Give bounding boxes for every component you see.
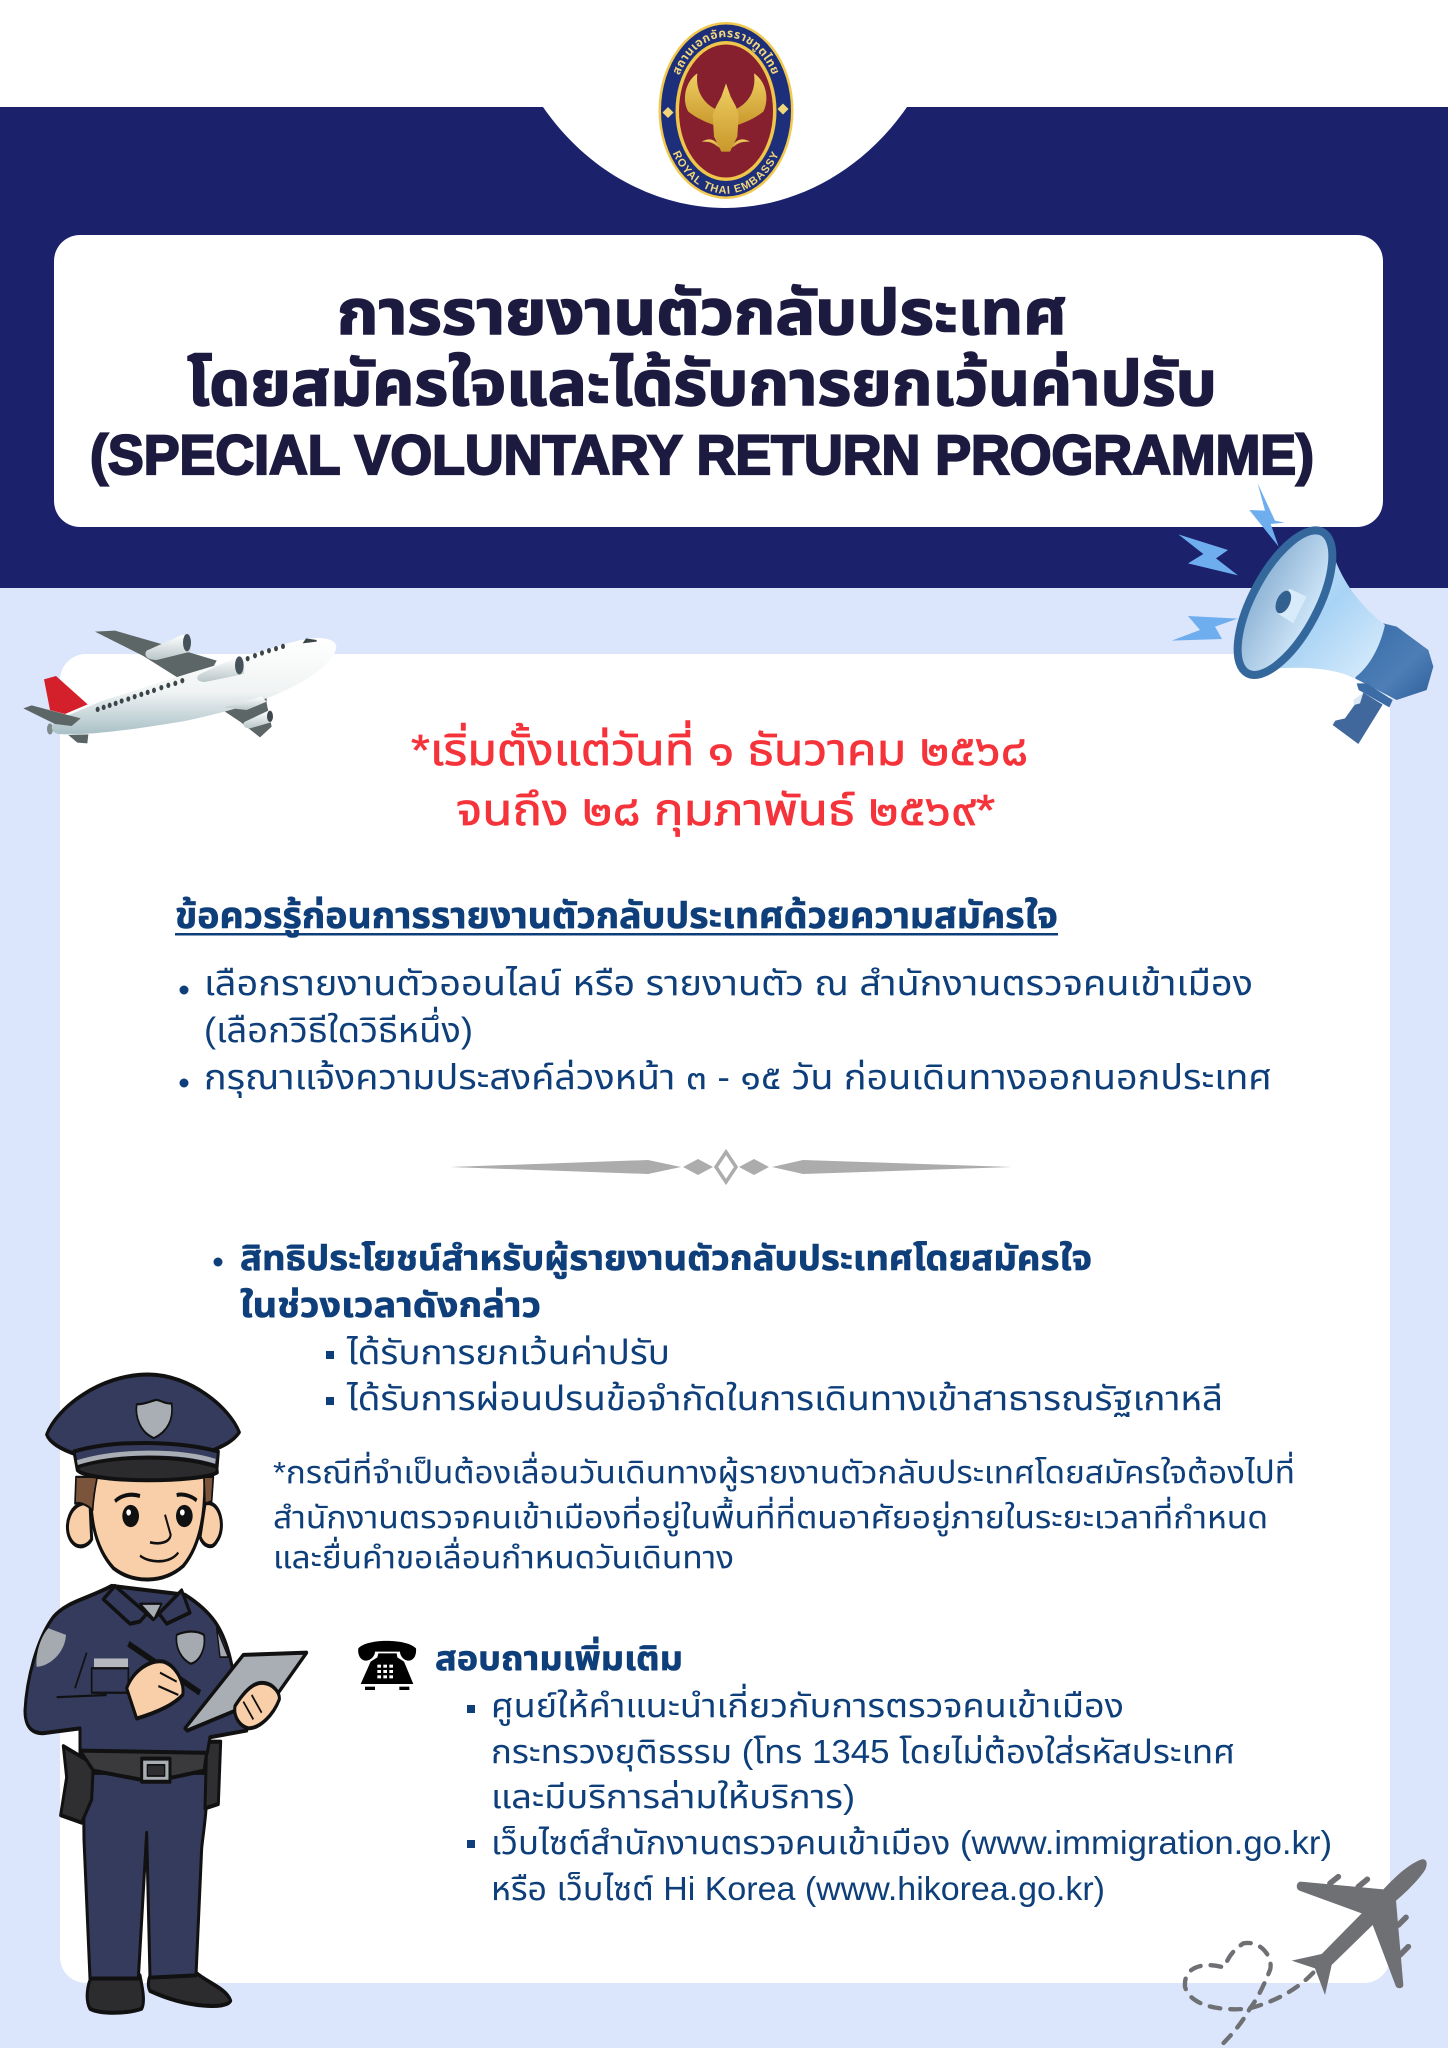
embassy seal: สถานเอกอัครราชทูตไทย — [674, 30, 778, 74]
title line 1: การรายงานตัวกลับประเทศ — [337, 279, 1067, 348]
face — [122, 1505, 139, 1527]
lightning bolts — [1172, 483, 1285, 641]
benefits list: ได้รับการยกเว้นค่าปรับ — [346, 1334, 670, 1372]
bullet list: before reporting: กรุณาแจ้งความประสงค์ล่วงหน้า ๓ - ๑๕ วัน ก่อนเดินทางออกนอกประเทศ — [204, 1058, 1272, 1098]
icon: megaphone — [1172, 483, 1433, 744]
white top strip — [0, 0, 1448, 208]
bullet list: before reporting: (เลือกวิธีใดวิธีหนึ่ง) — [204, 1006, 473, 1050]
pen hand — [128, 1644, 200, 1693]
date line 2: จนถึง ๒๘ กุมภาพันธ์ ๒๕๖๙* — [456, 786, 995, 837]
icon: airliner — [23, 631, 336, 743]
note: *กรณีที่จำเป็นต้องเลื่อนวันเดินทางผู้รายงานตัวกลับประเทศโดยสมัครใจต้องไปที่ — [273, 1451, 1295, 1491]
contact list: เว็บไซต์สำนักงานตรวจคนเข้าเมือง (www.immigration.go.kr) — [491, 1824, 1332, 1861]
contact list: กระทรวงยุติธรรม (โทร 1345 โดยไม่ต้องใส่รหัสประเทศ — [491, 1733, 1235, 1772]
contact list: ศูนย์ให้คำแนะนำเกี่ยวกับการตรวจคนเข้าเมือง — [491, 1683, 1124, 1726]
note: และยื่นคำขอเลื่อนกำหนดวันเดินทาง — [273, 1536, 734, 1575]
holster — [61, 1746, 93, 1823]
tablet hand — [235, 1683, 279, 1728]
contact heading: สอบถามเพิ่มเติม — [435, 1636, 683, 1678]
plane silhouette — [1292, 1859, 1427, 1995]
embassy seal: ROYAL THAI EMBASSY — [673, 150, 778, 194]
note — [273, 1451, 1295, 1575]
benefits list: ได้รับการผ่อนปรนข้อจำกัดในการเดินทางเข้าสาธารณรัฐเกาหลี — [346, 1380, 1223, 1418]
contact list: หรือ เว็บไซต์ Hi Korea (www.hikorea.go.kr) — [491, 1870, 1105, 1907]
title line 2: โดยสมัครใจและได้รับการยกเว้นค่าปรับ — [187, 350, 1217, 419]
date line 1: *เริ่มตั้งแต่วันที่ ๑ ธันวาคม ๒๕๖๘ — [411, 720, 1028, 775]
icon: plane with dashed heart trail — [1185, 1859, 1427, 2048]
contact list — [467, 1683, 1332, 1907]
date range — [411, 720, 1028, 837]
title line 3: (SPECIAL VOLUNTARY RETURN PROGRAMME) — [90, 423, 1314, 486]
title panel — [54, 235, 1383, 527]
collar — [103, 1586, 190, 1624]
icon: garuda — [685, 73, 766, 152]
note: สำนักงานตรวจคนเข้าเมืองที่อยู่ในพื้นที่ที่ตนอาศัยอยู่ภายในระยะเวลาที่กำหนด — [273, 1496, 1268, 1536]
tablet — [185, 1653, 307, 1731]
benefits list: สิทธิประโยชน์สำหรับผู้รายงานตัวกลับประเทศโดยสมัครใจ — [240, 1239, 1092, 1279]
section heading: ข้อควรรู้ก่อนการรายงานตัวกลับประเทศด้วยความสมัครใจ — [175, 895, 1058, 937]
embassy seal — [658, 22, 794, 199]
belt — [80, 1751, 207, 1780]
trousers — [83, 1773, 207, 1978]
icon: telephone — [358, 1641, 416, 1690]
benefits list: ในช่วงเวลาดังกล่าว — [240, 1286, 541, 1325]
head — [90, 1475, 205, 1580]
bullet list: before reporting: เลือกรายงานตัวออนไลน์ หรือ รายงานตัว ณ สำนักงานตรวจคนเข้าเมือง — [204, 964, 1253, 1003]
cap — [47, 1374, 239, 1455]
torso — [25, 1586, 247, 1753]
bullet list: before reporting — [180, 964, 1272, 1098]
benefits list — [214, 1239, 1223, 1418]
contact list: และมีบริการล่ามให้บริการ) — [491, 1778, 855, 1815]
shoulder patches and badge — [36, 1628, 66, 1667]
navy header band — [0, 107, 1448, 588]
panel: main content card — [60, 654, 1390, 1983]
shoes — [87, 1975, 143, 2013]
icon: police officer — [25, 1374, 307, 2013]
dashed trail — [1185, 1943, 1313, 2048]
